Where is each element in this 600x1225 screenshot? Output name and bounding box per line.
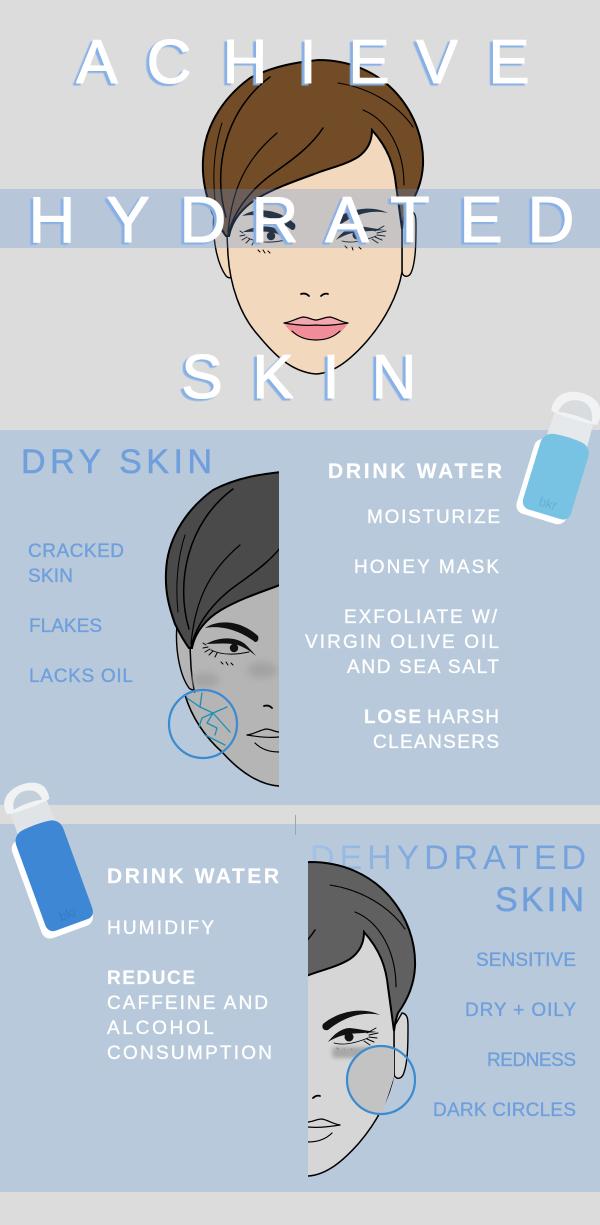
dehydrated skin remedies <box>107 865 279 1064</box>
dehydrated skin symptoms <box>433 950 576 1121</box>
dry skin symptoms: FLAKES <box>29 616 102 637</box>
dry skin symptoms: SKIN <box>28 566 73 587</box>
dry skin symptoms: CRACKED <box>28 541 124 562</box>
dehydrated skin remedies: HUMIDIFY <box>107 918 214 939</box>
dry skin remedies: VIRGIN OLIVE OIL <box>305 632 499 653</box>
panel: dehydrated skin <box>0 824 600 1192</box>
dry skin remedies: MOISTURIZE <box>367 507 500 528</box>
dehydrated skin symptoms: SENSITIVE <box>476 950 576 971</box>
heading: dehydrated skin: SKIN <box>495 881 584 919</box>
dry skin remedies: HARSH <box>427 707 499 728</box>
title <box>29 28 574 412</box>
dehydrated skin symptoms: DRY + OILY <box>465 1000 576 1021</box>
panel: dry skin <box>0 430 600 805</box>
dehydrated skin symptoms: REDNESS <box>487 1050 576 1071</box>
title word: achieve: ACHIEVE <box>76 28 530 97</box>
dehydrated skin remedies: CAFFEINE AND <box>107 993 268 1014</box>
title band <box>0 189 600 248</box>
heading: dehydrated skin <box>310 839 586 919</box>
dry skin remedies <box>305 460 502 753</box>
heading: dehydrated skin: DEHYDRATED <box>310 839 586 877</box>
dehydrated skin remedies: DRINK WATER <box>107 865 279 888</box>
icon: blue water bottle <box>0 776 97 941</box>
title word: skin: SKIN <box>181 343 416 412</box>
dry skin remedies: LOSE <box>364 707 421 728</box>
callout: cracked skin circle <box>169 690 237 758</box>
dry skin remedies: DRINK WATER <box>328 460 502 483</box>
dry skin symptoms <box>28 541 133 687</box>
illustration: dry skin half face <box>164 471 279 787</box>
dry skin remedies: EXFOLIATE W/ <box>344 607 498 628</box>
dry skin remedies: CLEANSERS <box>373 732 499 753</box>
title word: hydrated: HYDRATED <box>29 183 574 256</box>
illustration: colour face <box>203 60 423 374</box>
heading: dry skin: DRY SKIN <box>21 443 212 481</box>
icon: light blue water bottle: bkr <box>537 493 559 513</box>
callout: dehydrated skin circle <box>347 1046 415 1114</box>
dehydrated skin remedies: REDUCE <box>107 968 195 989</box>
dry skin symptoms: LACKS OIL <box>29 666 133 687</box>
dry skin remedies: HONEY MASK <box>354 557 499 578</box>
icon: light blue water bottle <box>514 384 600 527</box>
dehydrated skin symptoms: DARK CIRCLES <box>433 1100 576 1121</box>
icon: blue water bottle: bkr <box>57 904 80 924</box>
illustration: dehydrated skin half face <box>308 861 416 1177</box>
dehydrated skin remedies: ALCOHOL <box>107 1018 214 1039</box>
dry skin remedies: AND SEA SALT <box>347 657 499 678</box>
dehydrated skin remedies: CONSUMPTION <box>107 1043 272 1064</box>
